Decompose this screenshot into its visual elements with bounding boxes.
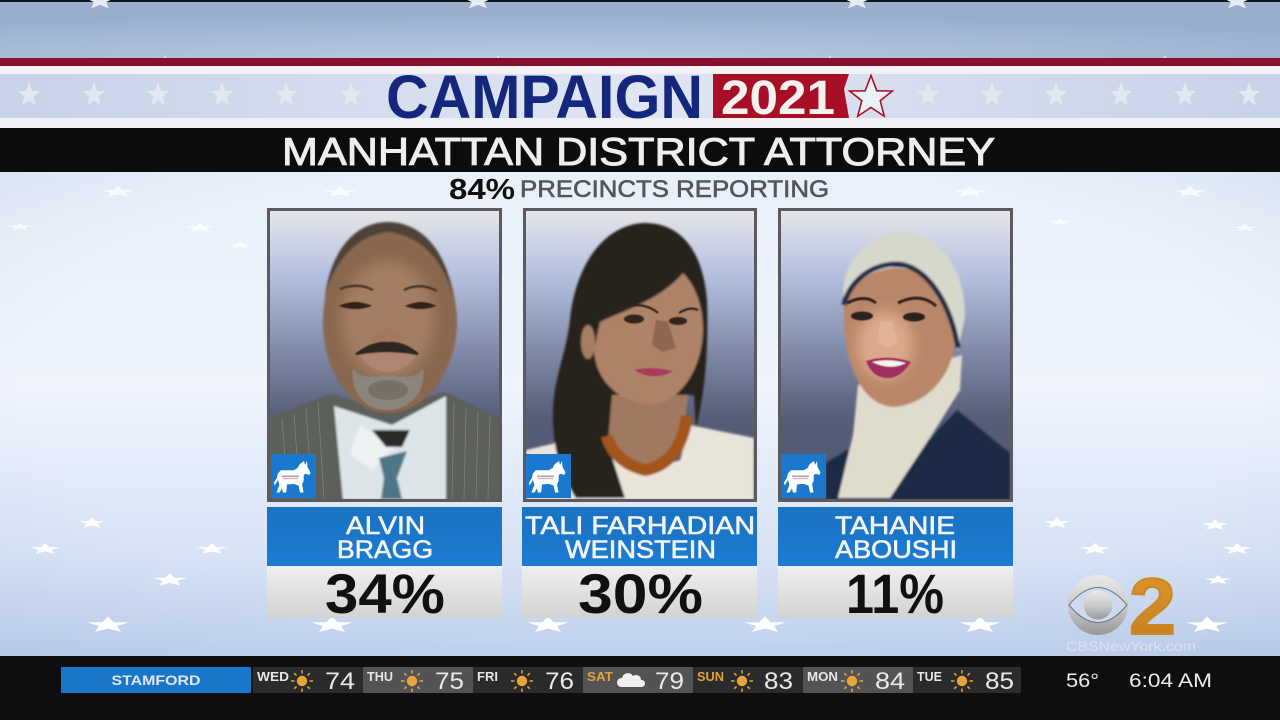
campaign wordmark: CAMPAIGN — [386, 63, 703, 131]
forecast: Wednesday — [253, 667, 363, 695]
panel: Tali Farhadian Weinstein — [522, 210, 757, 625]
title bar — [0, 128, 1280, 174]
name banner: ABOUSHI — [835, 536, 957, 564]
star band — [0, 74, 1280, 128]
campaign 2021 logo — [386, 63, 892, 131]
face shading — [342, 262, 434, 378]
year: 2021 — [721, 72, 835, 125]
forecast: Sunday: SUN — [697, 669, 724, 684]
2021 red box — [713, 74, 849, 118]
forecast: Tuesday: TUE — [917, 669, 942, 684]
forecast: Wednesday: 74 — [325, 668, 355, 695]
current temperature: 56° — [1066, 671, 1099, 692]
title: MANHATTAN DISTRICT ATTORNEY — [282, 131, 995, 174]
reporting label: PRECINCTS REPORTING — [520, 176, 829, 203]
precincts reporting — [449, 174, 829, 206]
name banner: TAHANIE — [835, 512, 955, 540]
forecast: Friday: FRI — [477, 669, 498, 684]
clock: 6:04 AM — [1129, 671, 1212, 692]
forecast: Sunday: 83 — [764, 668, 793, 695]
forecast: Monday: MON — [807, 669, 838, 684]
icon: CBS eye — [1068, 575, 1128, 635]
portrait frame — [268, 210, 500, 500]
vote share: 30% — [578, 562, 703, 625]
name banner: TALI FARHADIAN — [525, 512, 755, 540]
location label: STAMFORD — [112, 672, 200, 688]
vote share — [522, 562, 757, 625]
forecast: Saturday — [583, 667, 693, 695]
name banner: WEINSTEIN — [565, 536, 716, 564]
forecast: Saturday: SAT — [587, 669, 613, 684]
vote share: 34% — [325, 562, 445, 625]
portrait: Tali Farhadian Weinstein — [526, 211, 754, 500]
forecast: Monday — [803, 667, 913, 695]
portrait frame — [524, 210, 756, 500]
panel: Tahanie Aboushi — [778, 210, 1013, 625]
website: CBSNewYork.com — [1066, 638, 1196, 654]
vote share — [778, 562, 1013, 625]
forecast: Tuesday: 85 — [985, 668, 1014, 695]
name banner — [522, 507, 757, 566]
forecast: Tuesday — [913, 667, 1021, 695]
vote share — [267, 562, 502, 625]
percent reporting: 84% — [449, 174, 515, 206]
forecast: Thursday: 75 — [435, 668, 464, 695]
forecast: Friday — [473, 667, 583, 695]
name banner — [267, 507, 502, 566]
forecast: Sunday — [693, 667, 803, 695]
forecast: Wednesday: WED — [257, 669, 289, 684]
forecast: Saturday: 79 — [655, 668, 684, 695]
portrait: Tahanie Aboushi — [781, 211, 1010, 500]
forecast: Monday: 84 — [875, 668, 905, 695]
forecast: Friday: 76 — [545, 668, 574, 695]
icon: democrat donkey — [781, 454, 826, 498]
top sky band — [0, 0, 1280, 69]
icon: democrat donkey — [271, 454, 316, 498]
face highlight — [857, 311, 913, 379]
portrait: Alvin Bragg — [268, 211, 502, 500]
red and white stripes — [0, 58, 1280, 74]
panel: Alvin Bragg — [267, 210, 502, 625]
numeral 2: 2 — [1129, 562, 1176, 651]
footer ticker — [0, 656, 1280, 720]
name banner: BRAGG — [337, 536, 433, 564]
icon: democrat donkey — [526, 454, 571, 498]
portrait frame — [780, 210, 1012, 500]
CBS 2 logo — [1066, 562, 1196, 654]
background stars — [8, 186, 1257, 632]
vote share: 11% — [846, 562, 944, 625]
name banner: ALVIN — [346, 512, 425, 540]
logo star — [850, 76, 892, 116]
location label — [61, 667, 251, 693]
suit pinstripes — [282, 402, 490, 499]
forecast: Thursday: THU — [367, 669, 393, 684]
name banner — [778, 507, 1013, 566]
forecast: Thursday — [363, 667, 473, 695]
